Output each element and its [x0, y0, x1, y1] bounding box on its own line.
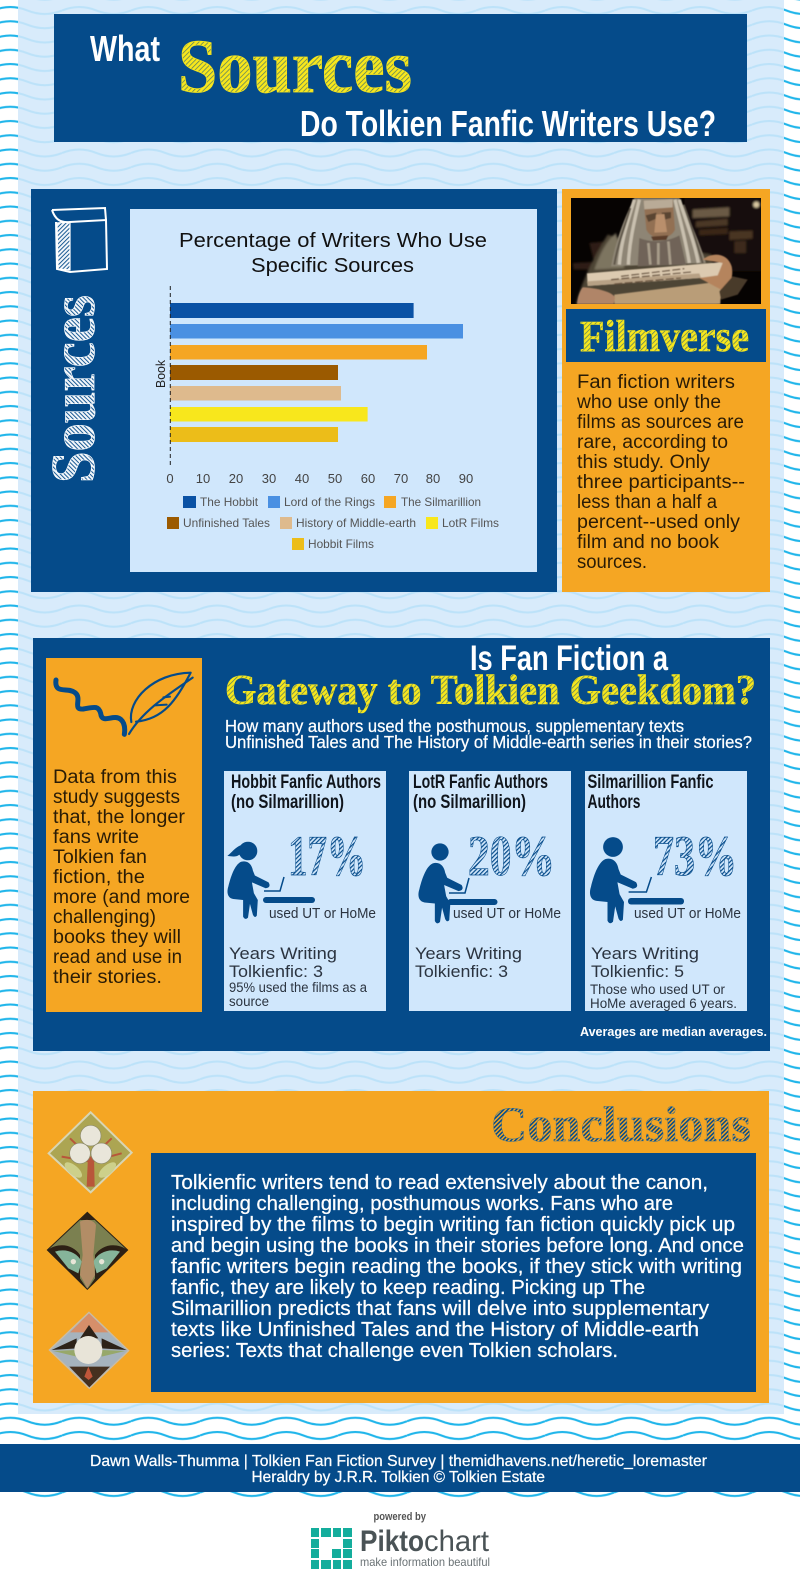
card: hobbit authors: Tolkienfic: 3 — [229, 962, 323, 981]
card: silmarillion authors: Tolkienfic: 5 — [591, 962, 684, 981]
axis ticks: 50 — [328, 471, 342, 486]
legend: LotR Films — [442, 516, 499, 530]
legend: History of Middle-earth — [296, 516, 416, 530]
text panel: conclusions body: including challenging, posthumous works. Fans who are — [171, 1193, 673, 1215]
card: lotr authors: Years Writing — [415, 944, 522, 963]
card: silmarillion authors: HoMe averaged 6 years. — [590, 996, 737, 1011]
icon: heraldry white tree device — [49, 1112, 132, 1192]
text: question: How many authors used the posthumous, supplementary texts — [225, 716, 684, 736]
title banner — [54, 14, 747, 144]
card: hobbit authors: Hobbit Fanfic Authors — [231, 772, 381, 793]
text: data summary: fiction, the — [53, 867, 145, 888]
icon: quill and squiggle — [56, 673, 193, 734]
panel: filmverse — [562, 189, 770, 592]
card: lotr authors: Tolkienfic: 3 — [415, 962, 508, 981]
bar chart — [130, 209, 537, 572]
card: lotr authors — [409, 771, 571, 1011]
text: filmverse body: who use only the — [576, 392, 721, 413]
stat: 73%: 73% — [653, 825, 737, 888]
axis ticks: 20 — [229, 471, 243, 486]
text panel: conclusions body: inspired by the films to begin writing fan fiction quickly pick up — [171, 1214, 735, 1236]
panel: gateway — [33, 638, 770, 1051]
legend — [167, 495, 499, 551]
legend: Hobbit Films — [308, 537, 374, 551]
logo: powered by Piktochart: chart — [424, 1525, 490, 1558]
heading: Conclusions: Conclusions — [491, 1096, 751, 1152]
icon: writer at laptop — [590, 837, 684, 923]
axis ticks: 70 — [394, 471, 408, 486]
card: hobbit authors: 95% used the films as a — [229, 980, 367, 995]
panel: conclusions — [33, 1091, 769, 1403]
text panel: conclusions body: and begin using the books in their stories before long. And once — [171, 1235, 744, 1257]
card: hobbit authors: Years Writing — [229, 944, 337, 963]
logo: powered by Piktochart: Pikto — [360, 1525, 424, 1558]
text panel: conclusions body: Silmarillion predicts that fans will delve into supplementary — [171, 1298, 709, 1320]
side panel: data summary — [46, 658, 202, 1012]
text: data summary: read and use in — [53, 947, 182, 968]
text: filmverse body: less than a half a — [577, 492, 717, 513]
card: hobbit authors: source — [229, 994, 269, 1009]
logo: powered by Piktochart — [311, 1511, 490, 1569]
card: lotr authors: used UT or HoMe — [453, 906, 561, 922]
text panel: conclusions body: Tolkienfic writers tend to read extensively about the canon, — [171, 1172, 708, 1194]
text: data summary: challenging) — [53, 907, 156, 928]
card: silmarillion authors: Silmarillion Fanfic — [588, 772, 714, 793]
axis ticks — [166, 471, 473, 486]
text: data summary: more (and more — [53, 887, 190, 908]
photo: wizard reading a scroll — [571, 198, 761, 304]
text: data summary: Tolkien fan — [53, 847, 147, 868]
axis ticks: 40 — [295, 471, 309, 486]
text panel: conclusions body: fanfic writers begin reading the books, if they stick with writing — [171, 1256, 742, 1278]
text: filmverse body: Fan fiction writers — [577, 372, 735, 393]
text: data summary — [53, 767, 190, 988]
axis label: Book: Book — [154, 359, 168, 388]
card: silmarillion authors — [585, 771, 747, 1011]
text: question: Unfinished Tales and The History of Middle-earth series in their stories? — [225, 732, 752, 752]
text: data summary: books they will — [53, 927, 181, 948]
card: silmarillion authors: Years Writing — [591, 944, 699, 963]
icon: Piktochart mark — [311, 1528, 352, 1569]
bars — [170, 286, 463, 465]
heading: gateway: Gateway to Tolkien Geekdom? — [225, 668, 756, 714]
text: filmverse body: film and no book — [577, 532, 720, 553]
card: lotr authors: LotR Fanfic Authors — [413, 772, 548, 793]
text: filmverse body: films as sources are — [577, 412, 744, 433]
heading: gateway — [225, 639, 756, 714]
panel: sources — [31, 189, 557, 592]
legend: The Hobbit — [200, 495, 259, 509]
axis ticks: 0 — [166, 471, 174, 486]
text: data summary: their stories. — [53, 967, 162, 988]
text: filmverse body: percent--used only — [577, 512, 741, 533]
icon: heraldry green tree device — [47, 1212, 128, 1289]
text: data summary: Data from this — [53, 767, 177, 788]
axis ticks: 10 — [196, 471, 210, 486]
icon: writer at laptop — [418, 843, 498, 923]
text: data summary: study suggests — [53, 787, 180, 808]
text: filmverse body: three participants-- — [577, 472, 745, 493]
text: data summary: that, the longer — [53, 807, 186, 828]
title banner: What — [90, 28, 160, 69]
text: filmverse body: sources. — [577, 552, 647, 573]
icon: book — [52, 208, 107, 272]
logo: powered by Piktochart: powered by — [374, 1511, 427, 1523]
footer: credits — [0, 1444, 800, 1492]
chart title: Specific Sources — [251, 255, 414, 277]
axis ticks: 90 — [459, 471, 473, 486]
stat: 20%: 20% — [468, 825, 555, 888]
card: hobbit authors: used UT or HoMe — [269, 906, 376, 922]
icon: writer at laptop — [227, 842, 315, 919]
footer: credits: Heraldry by J.R.R. Tolkien © Tolkien Estate — [252, 1469, 545, 1486]
text: filmverse body: rare, according to — [577, 432, 728, 453]
legend: Unfinished Tales — [183, 516, 270, 530]
text: data summary: fans write — [53, 827, 139, 848]
text: filmverse body — [576, 372, 745, 573]
card: hobbit authors — [224, 771, 386, 1011]
card: silmarillion authors: Those who used UT or — [590, 982, 725, 997]
title banner: Sources — [178, 25, 412, 109]
axis ticks: 80 — [426, 471, 440, 486]
card: lotr authors: (no Silmarillion) — [413, 792, 526, 813]
text: filmverse body: this study. Only — [577, 452, 711, 473]
text panel: conclusions body: texts like Unfinished Tales and the History of Middle-earth — [171, 1319, 699, 1341]
heading: Sources vertical: Sources — [40, 295, 108, 483]
text panel: conclusions body: fanfic, they are likely to keep reading. Picking up The — [171, 1277, 645, 1299]
text panel: conclusions body: series: Texts that challenge even Tolkien scholars. — [171, 1340, 618, 1362]
card: hobbit authors: (no Silmarillion) — [231, 792, 344, 813]
axis ticks: 30 — [262, 471, 276, 486]
logo: powered by Piktochart: make information beautiful — [360, 1555, 490, 1569]
card: silmarillion authors: used UT or HoMe — [634, 906, 741, 922]
text: question — [225, 716, 752, 752]
card: silmarillion authors: Authors — [588, 792, 640, 813]
heading: Filmverse: Filmverse — [580, 312, 749, 361]
text panel: conclusions body — [151, 1153, 756, 1392]
legend: Lord of the Rings — [284, 495, 375, 509]
note: median averages: Averages are median averages. — [580, 1024, 767, 1039]
legend: The Silmarillion — [401, 495, 481, 509]
icon: heraldry white flower device — [49, 1312, 129, 1388]
stat: 17%: 17% — [288, 825, 366, 888]
chart title: Percentage of Writers Who Use — [179, 230, 487, 252]
axis ticks: 60 — [361, 471, 375, 486]
chart title — [179, 230, 487, 277]
heading: gateway: Is Fan Fiction a — [470, 639, 668, 678]
footer: credits: Dawn Walls-Thumma | Tolkien Fan Fiction Survey | themidhavens.net/heretic_loremaster — [90, 1453, 708, 1470]
